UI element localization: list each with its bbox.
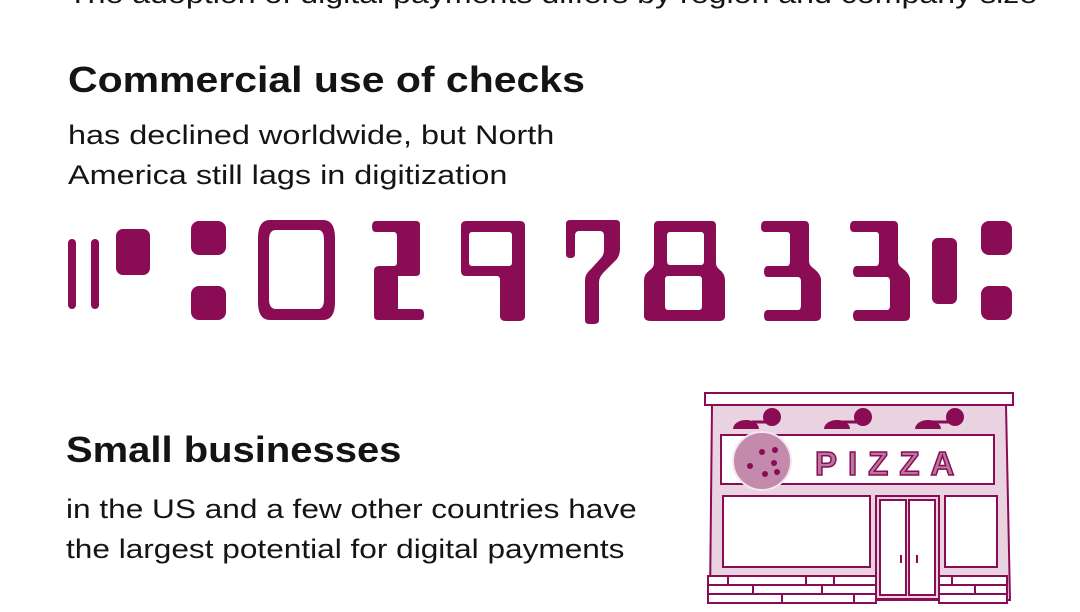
illustration: pizza shop: PIZZA [815,445,965,482]
text: checks [68,120,554,190]
text: checks: America still lags in digitization [68,160,507,190]
text: small businesses: in the US and a few other countries have [66,494,637,524]
pizza [733,432,791,490]
text: small businesses: the largest potential for digital payments [66,534,624,564]
heading: checks: Commercial use of checks [68,59,585,100]
illustration: pizza shop [704,392,1014,604]
text: checks: has declined worldwide, but North [68,120,554,150]
heading: small businesses: Small businesses [66,429,401,470]
text: small businesses [66,494,637,564]
